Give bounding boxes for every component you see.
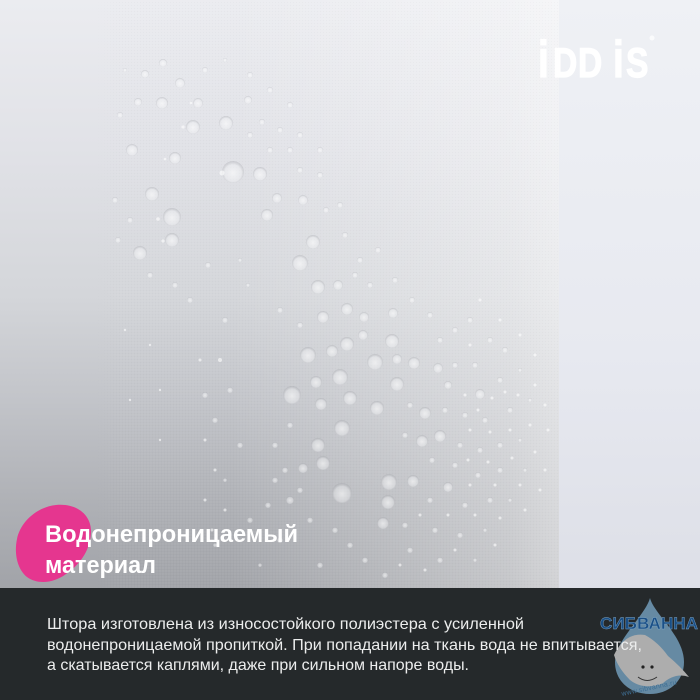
pink blob behind heading — [16, 505, 91, 582]
description text: а скатывается каплями, даже при сильном напоре воды. — [47, 657, 469, 674]
logo: IDDIS: D — [578, 41, 602, 87]
logo: IDDIS: i — [613, 29, 624, 88]
logo: IDDIS — [538, 29, 654, 88]
description text: водонепроницаемой пропиткой. При попадании на ткань вода не впитывается, — [47, 637, 642, 654]
logo: IDDIS: S — [626, 41, 648, 87]
watermark: Сибванна bathtub logo — [600, 598, 698, 698]
water droplets — [112, 58, 532, 578]
heading: материал — [45, 552, 156, 579]
description text — [47, 616, 642, 674]
logo: IDDIS: i — [538, 29, 549, 88]
panel: dark description — [0, 588, 700, 700]
small droplets and glints — [124, 102, 550, 571]
watermark: Сибванна bathtub logo: СИБВАННА — [600, 614, 698, 633]
heading: Водонепроницаемый — [45, 521, 298, 548]
logo: IDDIS: D — [553, 41, 577, 87]
watermark: Сибванна bathtub logo: www.sibvanna.ru — [620, 679, 677, 698]
heading — [45, 521, 298, 579]
description text: Штора изготовлена из износостойкого полиэстера с усиленной — [47, 616, 524, 633]
